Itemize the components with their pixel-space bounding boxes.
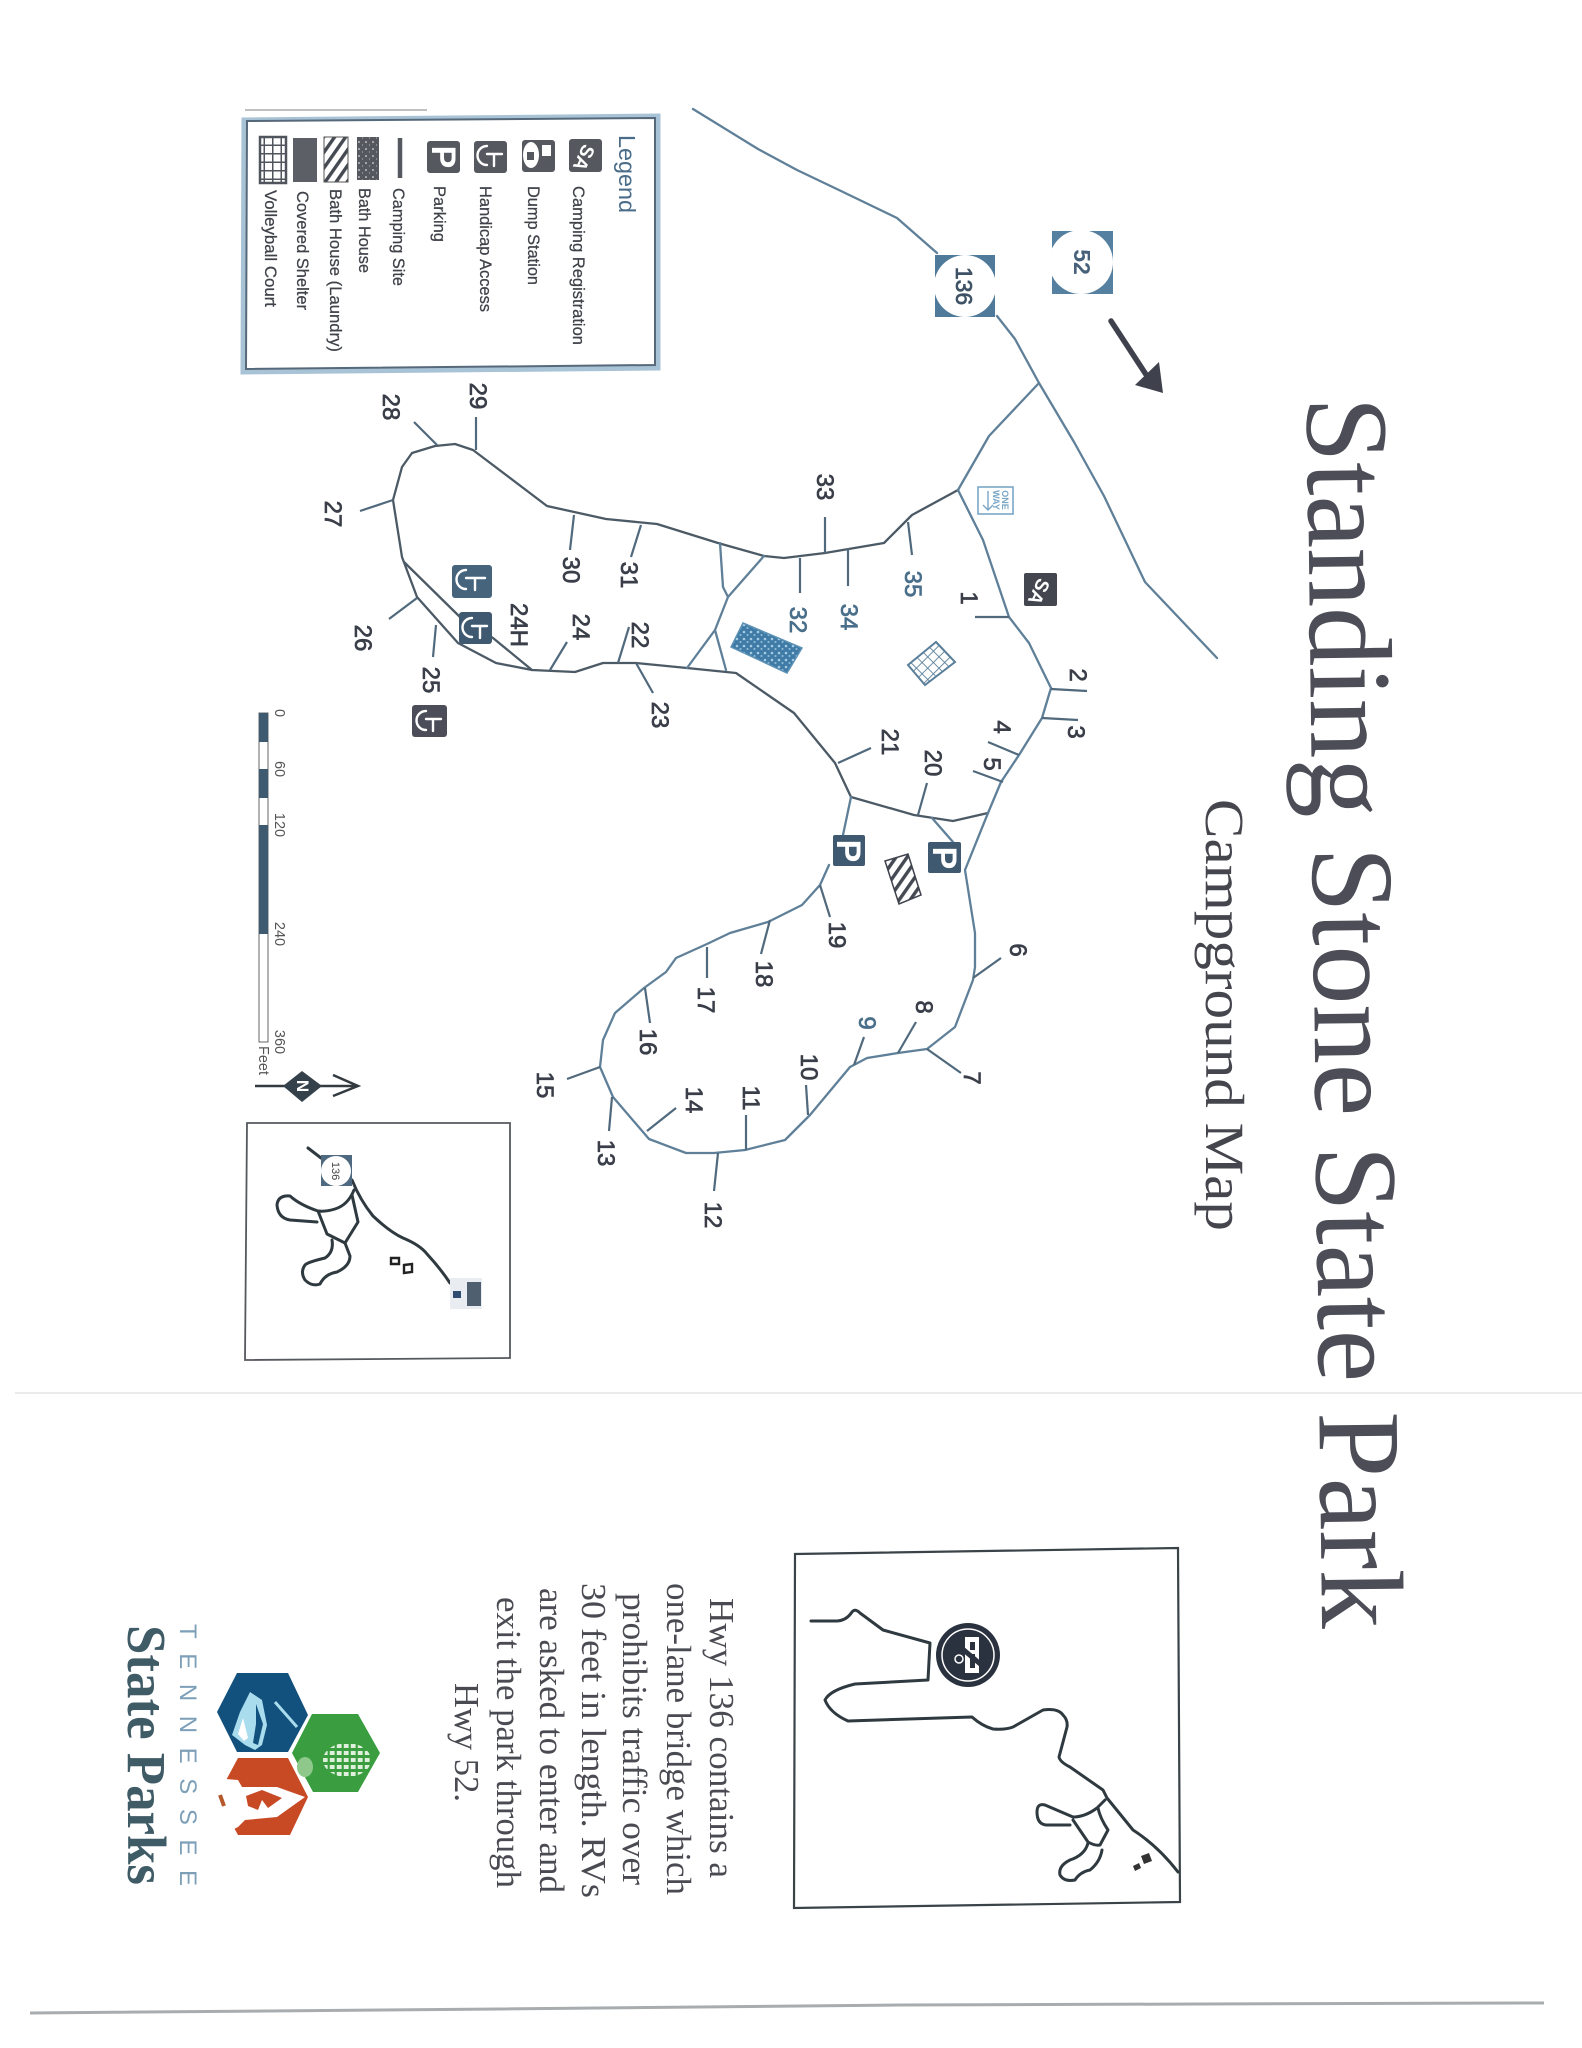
site 28: 28 bbox=[377, 394, 404, 420]
site 10 bbox=[795, 1054, 822, 1115]
site 22: 22 bbox=[626, 622, 653, 648]
campground map bbox=[319, 383, 1091, 1228]
site 29 bbox=[464, 383, 491, 450]
site 7: 7 bbox=[958, 1071, 985, 1085]
site 31 bbox=[615, 525, 642, 588]
site 32 bbox=[784, 558, 811, 633]
legend heading: Legend bbox=[614, 135, 640, 213]
site 30: 30 bbox=[557, 557, 584, 583]
scale bar: 60 bbox=[271, 761, 287, 777]
site 24 bbox=[550, 614, 594, 670]
scale bar: Feet bbox=[255, 1046, 271, 1075]
site 6: 6 bbox=[1004, 943, 1031, 957]
site 11: 11 bbox=[737, 1086, 764, 1110]
scale bar: 360 bbox=[271, 1030, 287, 1054]
icon: no long vehicles sign bbox=[936, 1623, 1000, 1687]
logo wordmark: State Parks: State Parks bbox=[116, 1625, 177, 1885]
site 13 bbox=[592, 1097, 619, 1166]
site 4 bbox=[988, 720, 1019, 755]
bottom edge line bbox=[30, 2003, 1544, 2013]
icon: one way sign: WAY bbox=[991, 490, 1001, 510]
note text: Hwy 136 contains a bbox=[702, 1598, 741, 1878]
legend item: handicap access bbox=[474, 141, 507, 312]
site 35 bbox=[899, 522, 926, 597]
road sign: highway 52 bbox=[1049, 230, 1113, 294]
site 9 bbox=[853, 1016, 880, 1065]
site 25: 25 bbox=[417, 667, 444, 693]
site 16: 16 bbox=[634, 1029, 661, 1055]
north arrow: N bbox=[293, 1080, 312, 1092]
scale bar: 240 bbox=[271, 922, 287, 946]
site 6 bbox=[973, 943, 1031, 978]
site 12 bbox=[699, 1153, 726, 1228]
site 1 bbox=[955, 591, 1009, 617]
legend item: bath house bbox=[355, 137, 379, 273]
site 16 bbox=[634, 988, 661, 1055]
site 2: 2 bbox=[1064, 668, 1091, 682]
site 3 bbox=[1042, 718, 1089, 739]
subtitle: Campground Map bbox=[1194, 799, 1255, 1231]
icon: volleyball court bbox=[908, 642, 955, 685]
road sign: highway 52: 52 bbox=[1069, 249, 1095, 275]
site 2 bbox=[1051, 668, 1091, 691]
site 30 bbox=[557, 515, 584, 583]
site 32: 32 bbox=[784, 607, 811, 633]
arrow bbox=[1111, 321, 1163, 393]
legend item: handicap access: Handicap Access bbox=[476, 186, 494, 312]
site 15 bbox=[531, 1067, 600, 1098]
mini buildings bbox=[1133, 1853, 1152, 1871]
site 35: 35 bbox=[899, 571, 926, 597]
north arrow bbox=[255, 1071, 358, 1102]
logo: Tennessee State Parks bbox=[116, 1624, 380, 1886]
legend item: parking: Parking bbox=[430, 186, 448, 242]
site markers and numbers bbox=[319, 383, 1091, 1228]
note text: exit the park through bbox=[489, 1597, 528, 1888]
site 7 bbox=[927, 1049, 985, 1085]
legend item: bath house laundry: Bath House (Laundry) bbox=[326, 189, 344, 352]
site 22 bbox=[618, 622, 653, 663]
site 21: 21 bbox=[876, 729, 903, 755]
site 14 bbox=[647, 1087, 707, 1131]
panel: legend bbox=[243, 110, 658, 372]
site 20: 20 bbox=[919, 750, 946, 776]
legend item: volleyball court: Volleyball Court bbox=[261, 190, 279, 307]
locator map: top bbox=[245, 1123, 510, 1360]
fold line bbox=[15, 1392, 1582, 1394]
site 34: 34 bbox=[835, 604, 862, 630]
site 4: 4 bbox=[988, 720, 1015, 734]
site 15: 15 bbox=[531, 1072, 558, 1098]
site 24H: 24H bbox=[505, 603, 532, 647]
site 34 bbox=[835, 548, 862, 630]
logo wordmark: Tennessee: TENNESSEE bbox=[174, 1624, 201, 1886]
hexagon: fish bbox=[217, 1673, 308, 1752]
site 28 bbox=[377, 394, 437, 445]
site 17 bbox=[692, 947, 719, 1013]
site 10: 10 bbox=[795, 1054, 822, 1080]
legend item: bath house: Bath House bbox=[355, 188, 373, 273]
legend item: covered shelter: Covered Shelter bbox=[293, 191, 311, 311]
site 5: 5 bbox=[978, 757, 1005, 771]
legend item: bath house laundry bbox=[324, 137, 348, 352]
camp roads bbox=[393, 383, 1051, 1153]
site 14: 14 bbox=[680, 1087, 707, 1113]
hexagon: fire bbox=[213, 1758, 308, 1835]
note text: are asked to enter and bbox=[532, 1588, 571, 1893]
legend item: camping site: Camping Site bbox=[389, 188, 407, 286]
legend item: volleyball court bbox=[260, 137, 286, 307]
note text: 30 feet in length. RVs bbox=[574, 1583, 613, 1898]
note text: one-lane bridge which bbox=[659, 1583, 698, 1895]
mini sign 52 bbox=[450, 1278, 482, 1309]
legend item: dump station bbox=[522, 140, 555, 285]
scale bar: 120 bbox=[271, 813, 287, 837]
site 3: 3 bbox=[1062, 725, 1089, 739]
site 26: 26 bbox=[349, 625, 376, 651]
scale bar bbox=[255, 709, 287, 1075]
site 24: 24 bbox=[567, 614, 594, 640]
icon: one way sign bbox=[978, 487, 1013, 514]
site 27 bbox=[319, 500, 393, 527]
icon: covered shelter bbox=[731, 623, 802, 673]
mini buildings bbox=[391, 1258, 412, 1273]
hexagon: boot bbox=[292, 1714, 380, 1792]
site 18 bbox=[750, 920, 777, 987]
icon: bath house laundry bbox=[885, 854, 921, 904]
site 23: 23 bbox=[646, 702, 673, 728]
site 27: 27 bbox=[319, 501, 346, 527]
icon: one way sign: ONE bbox=[1000, 490, 1010, 510]
site 5 bbox=[973, 757, 1005, 782]
site 9: 9 bbox=[853, 1016, 880, 1030]
mini sign 136: 136 bbox=[329, 1162, 341, 1180]
site 33 bbox=[811, 474, 838, 553]
site 19: 19 bbox=[823, 922, 850, 948]
icon: handicap access C bbox=[412, 705, 447, 737]
legend item: parking: P bbox=[424, 146, 462, 168]
legend item: camping registration bbox=[568, 139, 602, 345]
site 31: 31 bbox=[615, 562, 642, 588]
site 13: 13 bbox=[592, 1140, 619, 1166]
legend item: camping registration: Camping Registration bbox=[569, 186, 587, 345]
site 8 bbox=[898, 1000, 937, 1053]
site 8: 8 bbox=[910, 1000, 937, 1014]
site 19 bbox=[820, 885, 850, 948]
site 21 bbox=[838, 729, 903, 763]
note text: prohibits traffic over bbox=[615, 1593, 654, 1885]
road sign: highway 136 bbox=[934, 255, 996, 317]
site 23 bbox=[636, 663, 673, 728]
site 17: 17 bbox=[692, 987, 719, 1013]
site 11 bbox=[737, 1086, 764, 1150]
legend item: parking bbox=[424, 141, 462, 242]
road sign: highway 136: 136 bbox=[951, 267, 977, 305]
locator map: bridge bbox=[794, 1548, 1180, 1908]
legend item: dump station: Dump Station bbox=[524, 186, 542, 285]
site 1: 1 bbox=[955, 591, 982, 605]
site 33: 33 bbox=[811, 474, 838, 500]
site 18: 18 bbox=[750, 961, 777, 987]
icon: handicap access A bbox=[452, 565, 492, 598]
site 25 bbox=[417, 625, 444, 693]
site 29: 29 bbox=[464, 383, 491, 409]
icon: parking west: P bbox=[829, 840, 867, 862]
scale bar: 0 bbox=[271, 709, 287, 717]
note text bbox=[447, 1583, 741, 1898]
site 20 bbox=[918, 750, 946, 815]
icon: parking east: P bbox=[925, 847, 963, 869]
icon: camping registration: SA bbox=[1023, 575, 1053, 608]
highway 136 road bbox=[693, 109, 1217, 658]
title: Standing Stone State Park bbox=[1281, 396, 1427, 1629]
note text: Hwy 52. bbox=[447, 1683, 486, 1802]
legend item: covered shelter bbox=[293, 138, 317, 311]
site 12: 12 bbox=[699, 1202, 726, 1228]
icon: handicap access B bbox=[459, 612, 492, 644]
mini sign 136 bbox=[321, 1155, 352, 1186]
legend item: camping registration: SA bbox=[568, 141, 598, 174]
site 26 bbox=[349, 598, 417, 651]
